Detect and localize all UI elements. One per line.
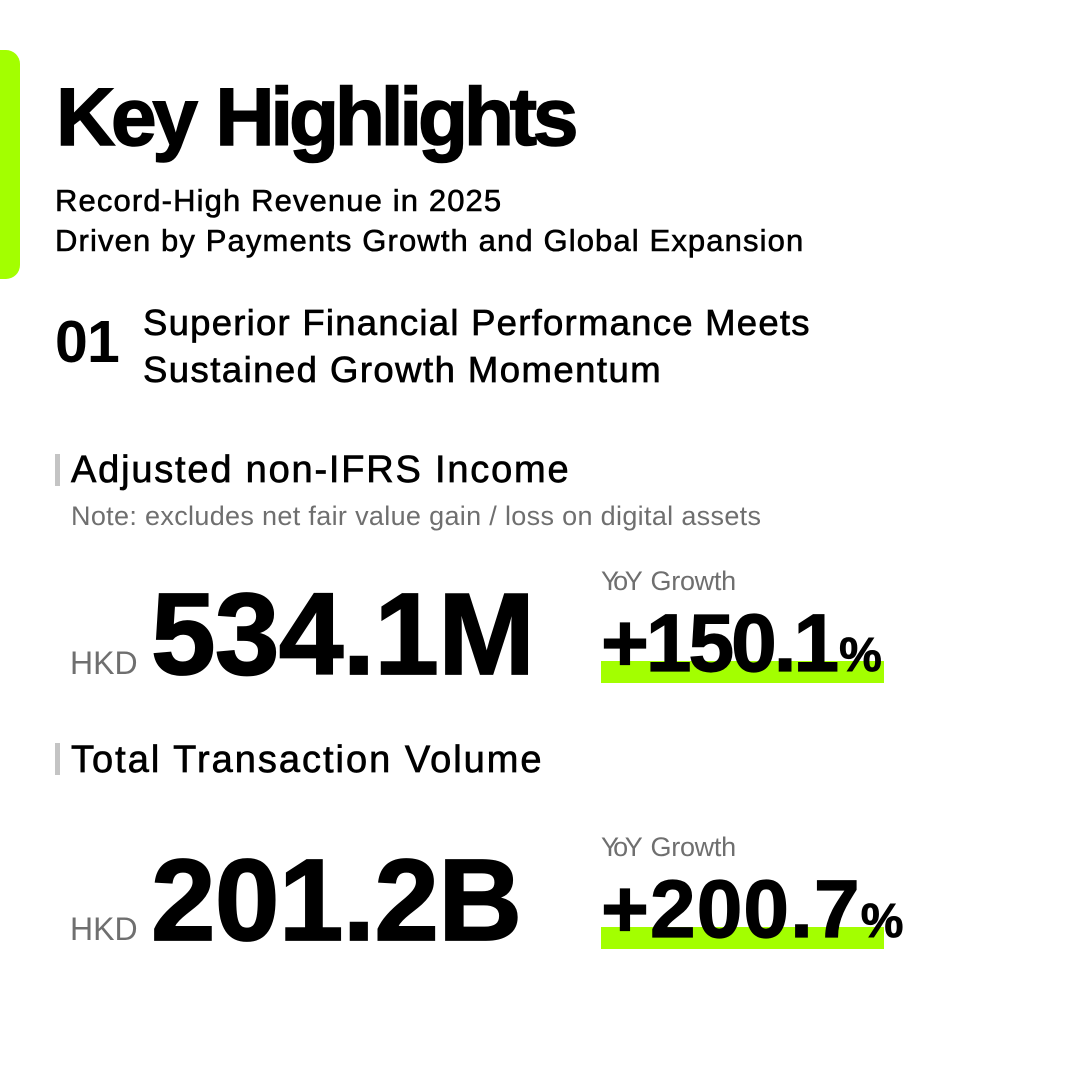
metric 1 note: Note: excludes net fair value gain / loss on digital assets <box>71 501 761 531</box>
metric 2 growth <box>601 832 903 955</box>
subtitle: Driven by Payments Growth and Global Expansion <box>55 223 804 258</box>
accent bar <box>0 50 20 279</box>
section heading <box>143 302 811 390</box>
growth highlight <box>601 661 884 683</box>
section heading: Superior Financial Performance Meets <box>143 302 811 343</box>
growth value: +200.7% <box>601 864 903 955</box>
metric 1 value: 534.1M <box>151 569 534 699</box>
growth label: YoY Growth <box>601 832 736 862</box>
growth highlight <box>601 927 884 949</box>
metric 1 label: Adjusted non-IFRS Income <box>71 449 570 491</box>
metric 2 currency: HKD <box>70 911 138 947</box>
metric 1 growth <box>601 566 884 689</box>
section heading: Sustained Growth Momentum <box>143 349 662 390</box>
metric 1 currency: HKD <box>70 645 138 681</box>
growth label: YoY Growth <box>601 566 736 596</box>
subtitle <box>55 183 804 258</box>
section number: 01 <box>55 309 119 375</box>
metric 2 value: 201.2B <box>151 835 521 965</box>
title: Key Highlights <box>56 72 574 163</box>
subtitle: Record-High Revenue in 2025 <box>55 183 502 218</box>
growth value: +150.1% <box>601 598 882 689</box>
metric 2 label: Total Transaction Volume <box>71 739 544 781</box>
